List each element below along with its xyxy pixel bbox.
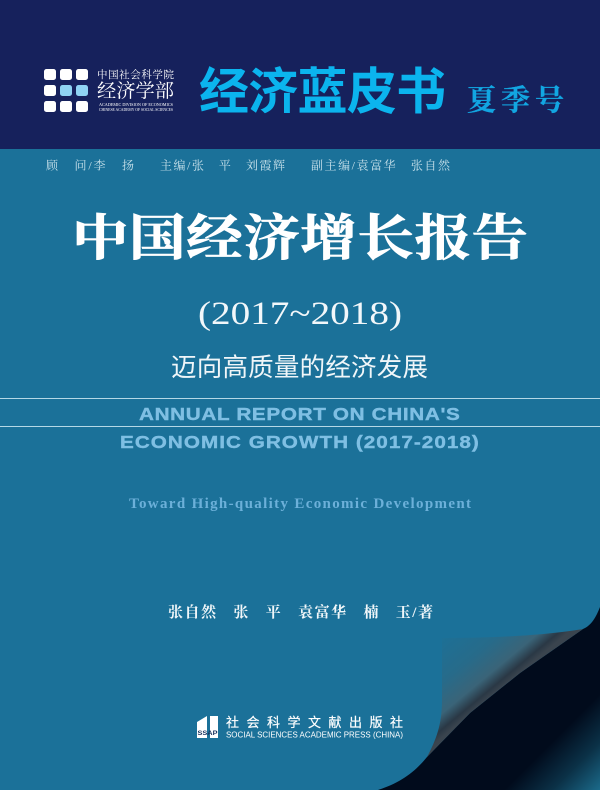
divider lines [0, 398, 600, 427]
text block: editors [46, 158, 451, 172]
text block: academic division name: CHINESE ACADEMY OF SOCIAL SCIENCES [99, 107, 173, 112]
icon: publisher logo [197, 716, 218, 738]
page curl dark underside [378, 607, 600, 790]
heading: English title: ECONOMIC GROWTH (2017-2018) [120, 432, 479, 453]
text block: years: (2017~2018) [198, 296, 402, 332]
icon: publisher logo: SSAP [198, 731, 218, 737]
illustration: page curl [378, 607, 600, 790]
text block: publisher name: 社会科学文献出版社 [226, 715, 403, 730]
text block: academic division name: 经济学部 [97, 80, 174, 102]
page curl flap [427, 629, 583, 757]
subtitle: English: Toward High-quality Economic Development [129, 496, 471, 512]
panel: navy header band [0, 0, 600, 149]
text block: publisher name [226, 715, 403, 740]
heading: summer issue: 夏季号 [467, 84, 564, 117]
icon: academic division logo grid [44, 69, 88, 112]
text block: authors: 张自然 张 平 袁富华 楠 玉/著 [168, 603, 433, 621]
text block: academic division name [97, 68, 174, 112]
subtitle: high quality development: 迈向高质量的经济发展 [171, 354, 428, 382]
text block: editors: 副主编/袁富华 张自然 [311, 158, 451, 172]
text block: academic division name: 中国社会科学院 [97, 68, 174, 81]
text block: editors: 顾 问/李 扬 [46, 158, 134, 172]
title: report name: 中国经济增长报告 [72, 211, 528, 266]
text block: publisher name: SOCIAL SCIENCES ACADEMIC PRESS (CHINA) [226, 730, 403, 740]
heading: English title: ANNUAL REPORT ON CHINA'S [139, 404, 460, 425]
heading: blue book series: 经济蓝皮书 [199, 64, 446, 120]
heading: English title [120, 404, 479, 453]
text block: academic division name: ACADEMIC DIVISION OF ECONOMICS [99, 102, 173, 107]
text block: editors: 主编/张 平 刘霞辉 [160, 158, 285, 172]
